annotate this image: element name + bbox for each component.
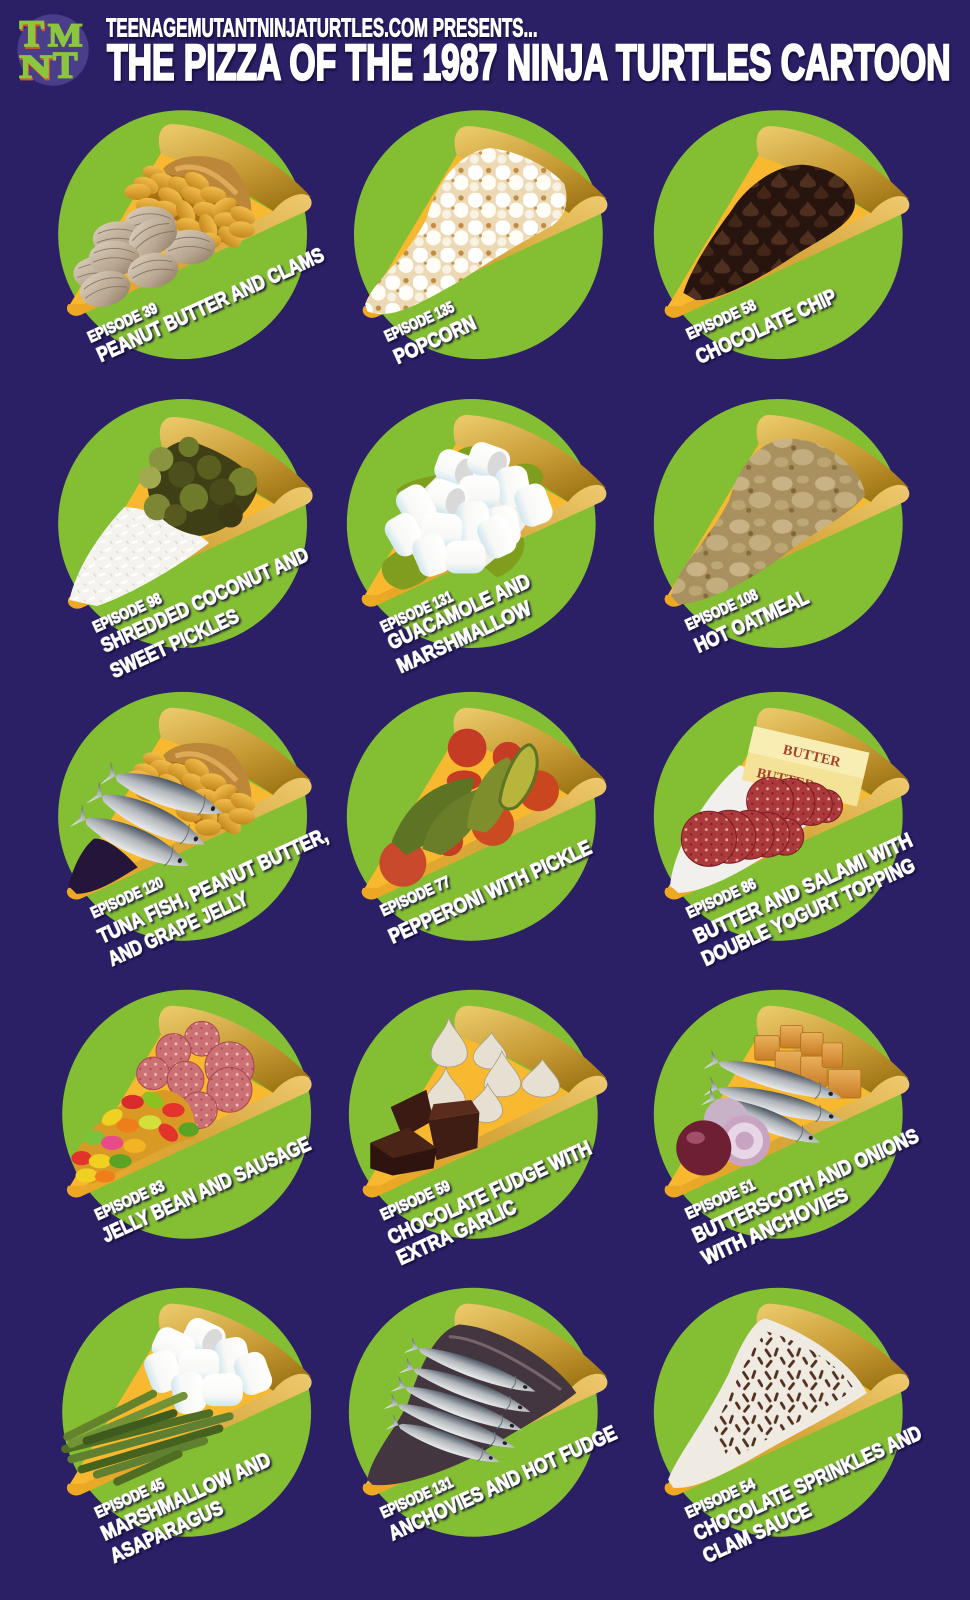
panel: butterscotch and onions with anchovies — [654, 990, 922, 1270]
label: GUACAMOLE AND — [384, 570, 534, 655]
label: HOT OATMEAL — [691, 586, 812, 658]
label: CHOCOLATE FUDGE WITH — [384, 1137, 595, 1249]
label: EPISODE 77 — [378, 874, 453, 920]
label — [683, 1422, 925, 1568]
label — [378, 1137, 595, 1270]
logo: TMNT — [17, 13, 89, 88]
label: PEANUT BUTTER AND CLAMS — [94, 243, 328, 367]
label — [378, 1422, 620, 1545]
panel: shredded coconut and sweet pickles — [58, 399, 313, 683]
label: PEPPERONI WITH PICKLE — [385, 836, 595, 948]
panel: guacamole and marshmallow — [347, 399, 606, 678]
label: EPISODE 58 — [684, 297, 759, 343]
label: MARSHMALLOW AND — [98, 1448, 274, 1545]
header — [17, 13, 951, 91]
panel: chocolate chip — [654, 110, 909, 369]
label: EPISODE 135 — [382, 299, 457, 345]
label: CLAM SAUCE — [699, 1499, 815, 1568]
label: WITH ANCHOVIES — [698, 1183, 852, 1270]
label: JELLY BEAN AND SAUSAGE — [99, 1133, 314, 1247]
label: EPISODE 98 — [90, 590, 165, 636]
label — [683, 586, 812, 658]
label: SWEET PICKLES — [107, 605, 243, 683]
label: ANCHOVIES AND HOT FUDGE — [385, 1422, 620, 1545]
asparagus — [65, 1394, 229, 1482]
label: EPISODE 120 — [88, 874, 166, 922]
label: EPISODE 59 — [378, 1178, 453, 1224]
label — [90, 543, 312, 683]
label — [93, 1448, 274, 1568]
label — [88, 824, 331, 971]
label: TUNA FISH, PEANUT BUTTER, — [95, 824, 331, 948]
label: EPISODE 51 — [683, 1176, 758, 1223]
label: BUTTERSCOTH AND ONIONS — [689, 1124, 922, 1247]
panel: tuna fish, peanut butter and grape jelly — [58, 692, 331, 971]
panel: hot oatmeal — [654, 399, 909, 658]
logo: TMNT: T — [19, 13, 44, 54]
logo: TMNT: M — [48, 18, 83, 54]
label: EPISODE 39 — [85, 300, 160, 346]
label — [93, 1133, 314, 1247]
label: EPISODE 54 — [683, 1475, 758, 1522]
panel: peanut butter and clams — [58, 110, 328, 367]
panel: anchovies and hot fudge — [349, 1288, 620, 1545]
panel: chocolate sprinkles and clam sauce — [654, 1288, 925, 1568]
logo: TMNT: N — [20, 52, 54, 88]
butter: BUTTER — [781, 742, 843, 771]
panel: popcorn — [354, 110, 607, 369]
label: EPISODE 108 — [683, 586, 761, 634]
logo: TMNT: T — [20, 15, 45, 56]
label: MARSHMALLOW — [393, 597, 535, 678]
panel: marshmallow and asparagus — [62, 1288, 312, 1568]
label: BUTTER AND SALAMI WITH — [690, 829, 916, 948]
label — [85, 243, 328, 367]
logo: TMNT: N — [19, 50, 53, 86]
heading: TEENAGEMUTANTNINJATURTLES.COM PRESENTS... — [106, 15, 538, 43]
label: CHOCOLATE CHIP — [692, 285, 840, 369]
label — [378, 570, 535, 678]
panel: butter and salami with double yogurt topping — [654, 692, 919, 971]
label: EPISODE 83 — [93, 1178, 167, 1224]
label: EPISODE 86 — [684, 876, 759, 922]
label — [683, 1124, 922, 1270]
label: AND GRAPE JELLY — [105, 887, 252, 971]
label: EPISODE 45 — [93, 1475, 168, 1522]
label: EPISODE 131 — [378, 1474, 456, 1522]
label: EXTRA GARLIC — [393, 1196, 520, 1270]
label: EPISODE 131 — [378, 588, 456, 636]
label: DOUBLE YOGURT TOPPING — [698, 854, 919, 971]
panel: pepperoni with pickle — [347, 692, 606, 948]
panel: jelly bean and sausage — [62, 990, 314, 1247]
butter: BUTTER — [755, 765, 817, 794]
label: ASAPARAGUS — [107, 1497, 227, 1568]
label — [684, 285, 840, 369]
logo: TMNT: T — [53, 45, 78, 86]
fudge — [370, 1090, 479, 1176]
panel: chocolate fudge with extra garlic — [349, 990, 607, 1270]
jelly beans — [71, 1088, 199, 1184]
label: POPCORN — [390, 312, 480, 369]
label: SHREDDED COCONUT AND — [98, 543, 312, 658]
butter — [742, 726, 869, 806]
